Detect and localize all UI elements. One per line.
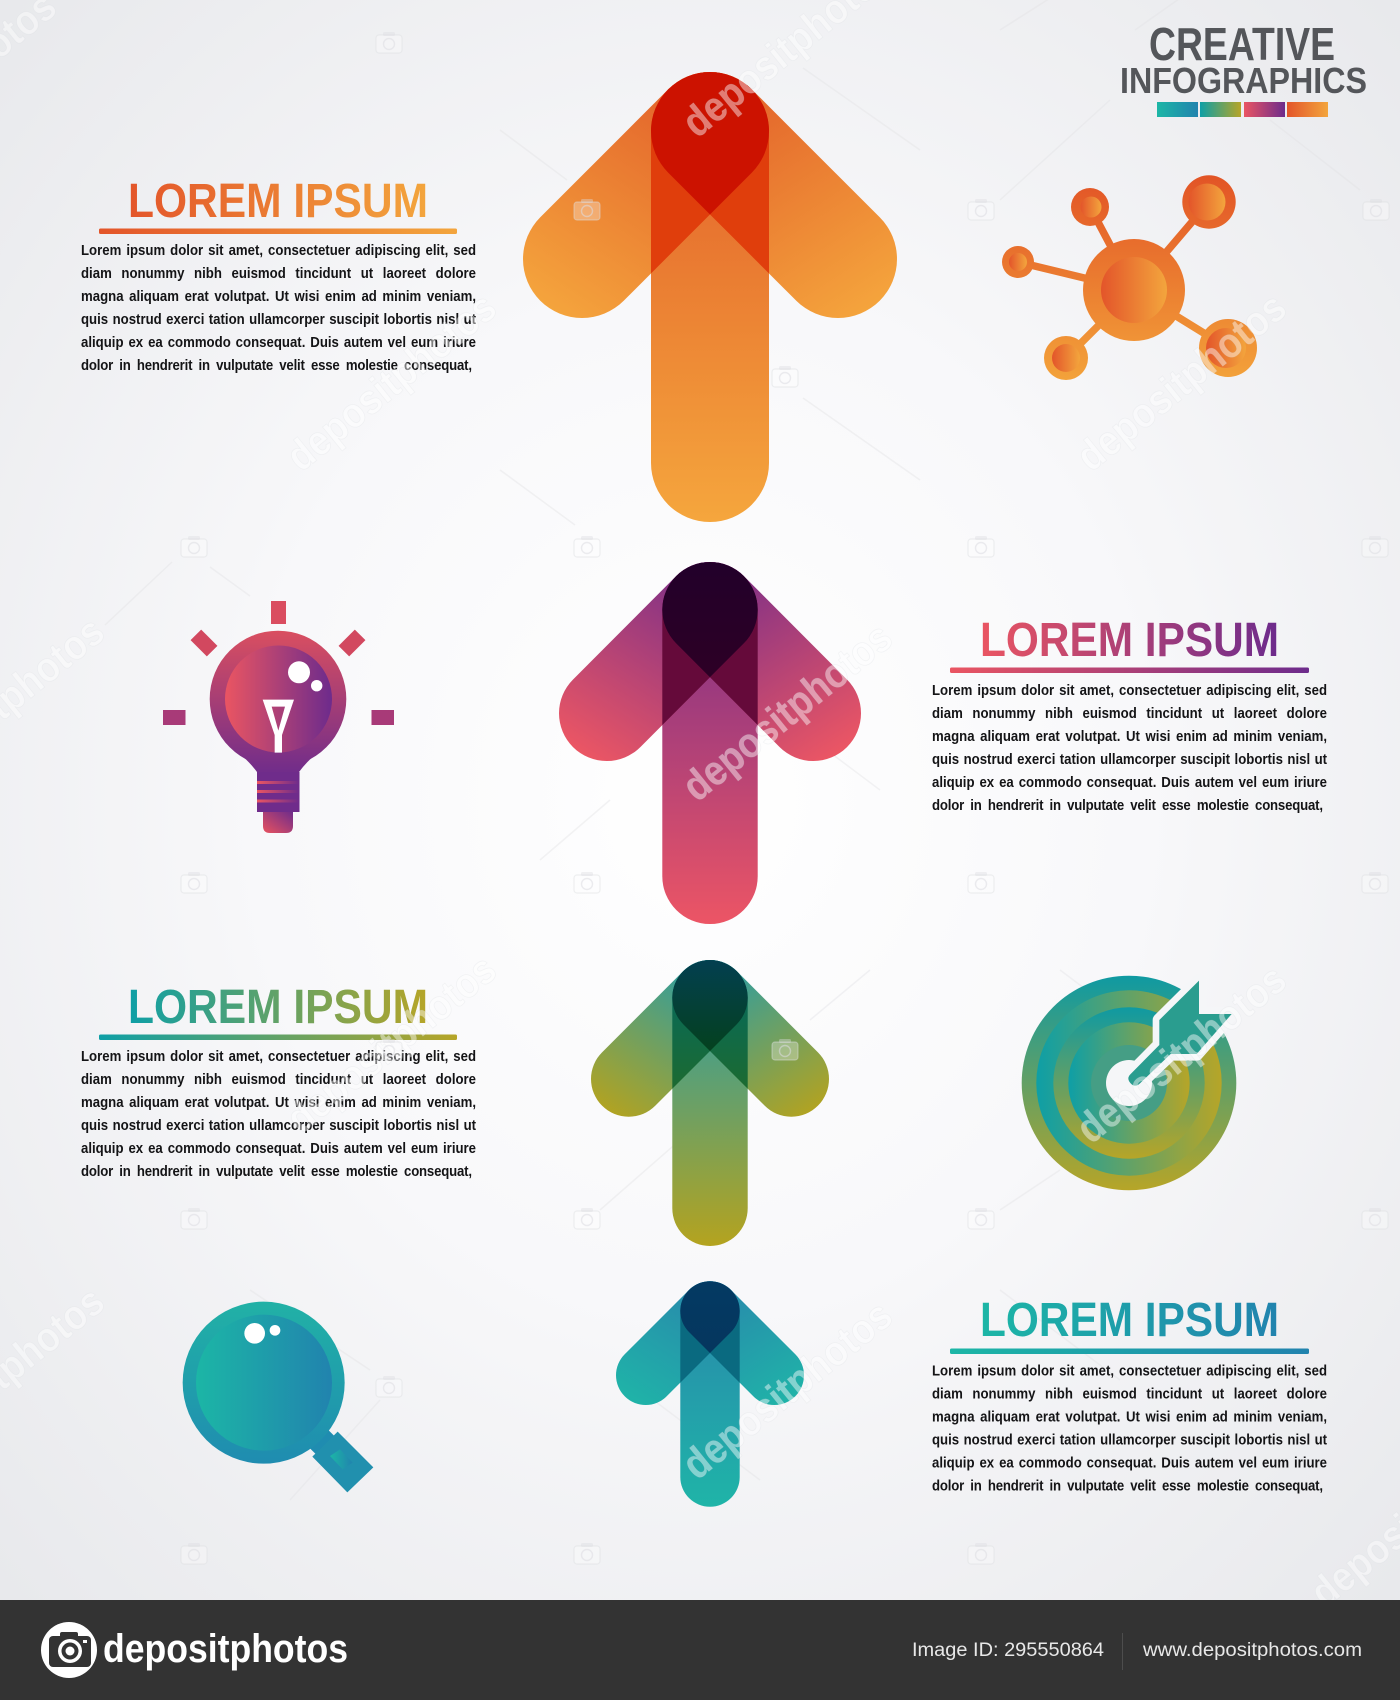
heading 3: LOREM IPSUM — [128, 981, 428, 1034]
watermark stamps: depositphotos — [277, 945, 505, 1142]
watermark stamps: depositphotos — [1067, 283, 1295, 480]
body text 3: quis nostrud exerci tation ullamcorper suscipit lobortis nisl ut — [81, 1116, 476, 1133]
body text 2: quis nostrud exerci tation ullamcorper suscipit lobortis nisl ut — [932, 750, 1327, 767]
body text 1: Lorem ipsum dolor sit amet, consectetuer adipiscing elit, sed — [81, 241, 476, 258]
body text 4: diam nonummy nibh euismod tincidunt ut laoreet dolore — [932, 1385, 1327, 1402]
body text 4: dolor in hendrerit in vulputate velit esse molestie consequat, — [932, 1477, 1323, 1494]
panel: text block 1 — [81, 175, 476, 373]
body text 4: quis nostrud exerci tation ullamcorper suscipit lobortis nisl ut — [932, 1431, 1327, 1448]
body text 3 — [81, 1047, 476, 1179]
icon: network molecule — [1002, 175, 1257, 380]
title: creative infographics — [1120, 18, 1367, 117]
title: creative infographics: INFOGRAPHICS — [1120, 60, 1367, 101]
title: creative infographics: CREATIVE — [1149, 18, 1335, 70]
logo wordmark: depositphotos — [103, 1627, 348, 1671]
heading 4: LOREM IPSUM — [980, 1294, 1279, 1347]
icon: light bulb — [163, 601, 394, 833]
body text 4: aliquip ex ea commodo consequat. Duis autem vel eum iriure — [932, 1454, 1327, 1471]
watermark stamps: depositphotos — [277, 283, 505, 480]
body text 1: magna aliquam erat volutpat. Ut wisi enim ad minim veniam, — [81, 287, 476, 304]
image id: Image ID: 295550864 — [912, 1640, 1104, 1661]
body text 1: aliquip ex ea commodo consequat. Duis autem vel eum iriure — [81, 333, 476, 350]
watermark stamps: depositphotos — [673, 613, 901, 810]
body text 3: Lorem ipsum dolor sit amet, consectetuer adipiscing elit, sed — [81, 1047, 476, 1064]
icon: magnifying glass — [183, 1302, 373, 1492]
body text 3: diam nonummy nibh euismod tincidunt ut laoreet dolore — [81, 1070, 476, 1087]
body text 4: Lorem ipsum dolor sit amet, consectetuer adipiscing elit, sed — [932, 1362, 1327, 1379]
body text 3: magna aliquam erat volutpat. Ut wisi enim ad minim veniam, — [81, 1093, 476, 1110]
body text 2: aliquip ex ea commodo consequat. Duis autem vel eum iriure — [932, 773, 1327, 790]
arrow 3: green — [629, 960, 791, 1246]
icon: logo camera — [41, 1622, 97, 1678]
body text 2: diam nonummy nibh euismod tincidunt ut laoreet dolore — [932, 704, 1327, 721]
panel: text block 2 — [932, 614, 1327, 813]
body text 1: diam nonummy nibh euismod tincidunt ut laoreet dolore — [81, 264, 476, 281]
body text 1 — [81, 241, 476, 373]
heading 1: LOREM IPSUM — [128, 175, 428, 228]
watermark stamps: depositphotos — [673, 1291, 901, 1488]
heading 2: LOREM IPSUM — [980, 614, 1279, 667]
body text 2: magna aliquam erat volutpat. Ut wisi enim ad minim veniam, — [932, 727, 1327, 744]
watermark stamps: depositphotos — [1067, 955, 1295, 1152]
body text 4: magna aliquam erat volutpat. Ut wisi enim ad minim veniam, — [932, 1408, 1327, 1425]
panel: text block 4 — [932, 1294, 1327, 1494]
arrow 1: orange — [582, 72, 838, 522]
body text 2: Lorem ipsum dolor sit amet, consectetuer adipiscing elit, sed — [932, 681, 1327, 698]
body text 2 — [932, 681, 1327, 813]
body text 2: dolor in hendrerit in vulputate velit esse molestie consequat, — [932, 796, 1323, 813]
arrow 2: magenta — [607, 562, 813, 924]
body text 1: quis nostrud exerci tation ullamcorper suscipit lobortis nisl ut — [81, 310, 476, 327]
body text 3: aliquip ex ea commodo consequat. Duis autem vel eum iriure — [81, 1139, 476, 1156]
panel: text block 3 — [81, 981, 476, 1179]
footer bar — [0, 1600, 1400, 1700]
site url: www.depositphotos.com — [1142, 1640, 1362, 1661]
arrow 4: teal — [646, 1281, 774, 1507]
icon: target with dart — [1022, 976, 1236, 1190]
body text 3: dolor in hendrerit in vulputate velit esse molestie consequat, — [81, 1162, 472, 1179]
body text 4 — [932, 1362, 1327, 1494]
body text 1: dolor in hendrerit in vulputate velit esse molestie consequat, — [81, 356, 472, 373]
